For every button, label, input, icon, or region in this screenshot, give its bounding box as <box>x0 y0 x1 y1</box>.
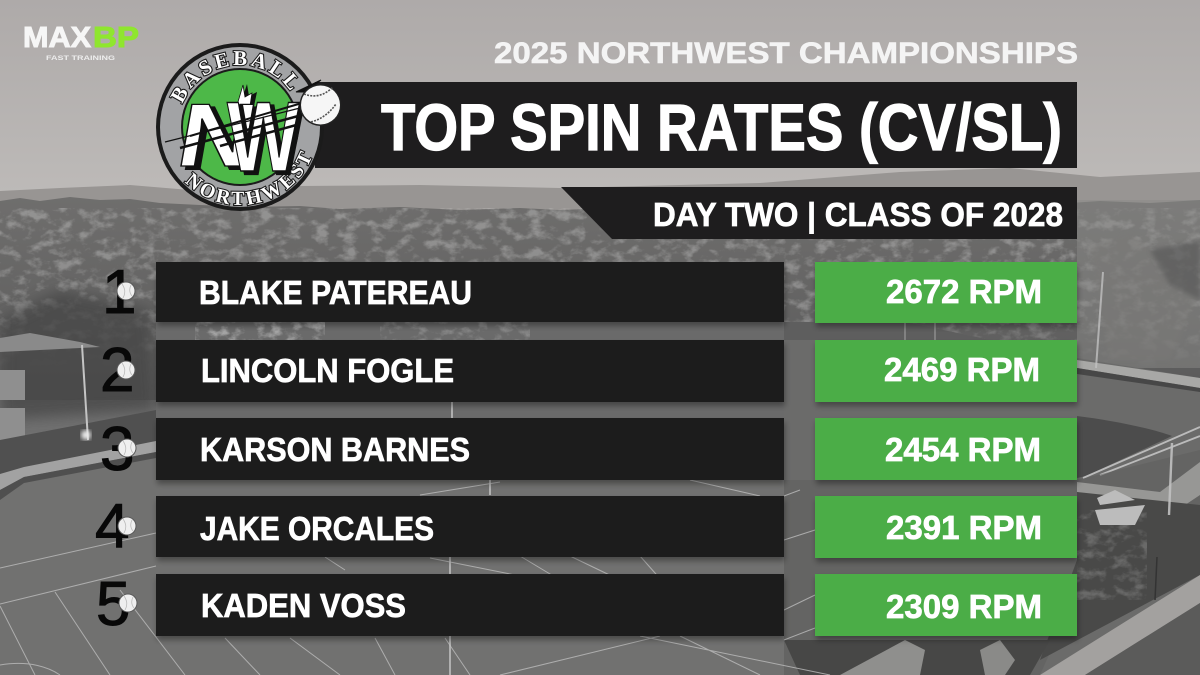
badge monogram NW: W <box>227 82 300 192</box>
value bar: 2391 RPM: 2391 RPM <box>886 509 1042 546</box>
badge monogram NW <box>165 82 304 195</box>
logo: MAXBP Fast Training: MAX <box>23 22 92 54</box>
value bar: 2672 RPM: 2672 RPM <box>886 273 1042 310</box>
value bar: 2454 RPM <box>815 418 1077 480</box>
field lines <box>0 480 830 675</box>
badge monogram NW: N <box>176 88 269 188</box>
right outfield <box>784 322 1200 675</box>
player bar: Karson Barnes <box>156 418 784 480</box>
baseball icon <box>118 516 136 536</box>
badge text: Baseball: BASEBALL <box>168 50 298 106</box>
baseball icon <box>116 282 136 300</box>
player bar: Blake Patereau <box>156 262 784 322</box>
player bar: Kaden Voss <box>156 574 784 636</box>
subtitle banner: DAY TWO | CLASS OF 2028 <box>653 196 1063 233</box>
logo: MAXBP Fast Training: FAST TRAINING <box>46 55 115 62</box>
player bar: Blake Patereau: BLAKE PATEREAU <box>199 274 472 311</box>
rank 5: 5 <box>96 570 130 639</box>
baseball icon <box>116 360 136 380</box>
logo: MAXBP Fast Training: BP <box>93 22 139 54</box>
field <box>0 400 1077 675</box>
baseball icon <box>118 438 136 458</box>
player bar: Lincoln Fogle: LINCOLN FOGLE <box>201 352 454 389</box>
player bar: Jake Orcales: JAKE ORCALES <box>200 510 434 547</box>
logo: MAXBP Fast Training <box>23 22 139 62</box>
rank 1: 1 <box>102 258 136 327</box>
subtitle banner <box>561 187 1077 239</box>
logo: Baseball Northwest badge <box>156 43 340 211</box>
title banner: TOP SPIN RATES (CV/SL) <box>381 90 1062 164</box>
player bar: Lincoln Fogle <box>156 340 784 402</box>
value bar: 2454 RPM: 2454 RPM <box>885 431 1041 468</box>
badge text: Northwest: NORTHWEST <box>183 149 313 206</box>
row 1 <box>102 258 1077 327</box>
value bar: 2469 RPM <box>815 340 1077 402</box>
badge monogram NW: W <box>231 85 304 195</box>
rank 3: 3 <box>100 415 134 484</box>
row 3 <box>100 415 1077 484</box>
fence left <box>0 441 156 490</box>
value bar: 2309 RPM: 2309 RPM <box>886 588 1042 625</box>
value bar: 2469 RPM: 2469 RPM <box>884 351 1040 388</box>
player bar: Kaden Voss: KADEN VOSS <box>201 587 406 624</box>
row 2 <box>100 336 1077 405</box>
row 4 <box>95 492 1077 561</box>
rank 4: 4 <box>95 492 129 561</box>
row 5 <box>96 570 1077 639</box>
value bar: 2672 RPM <box>815 262 1077 323</box>
darker hillside left <box>0 290 156 420</box>
value bar: 2391 RPM <box>815 496 1077 558</box>
baseball icon <box>118 594 138 612</box>
player bar: Jake Orcales <box>156 496 784 557</box>
event title: 2025 NORTHWEST CHAMPIONSHIPS <box>494 37 1078 70</box>
badge monogram NW: N <box>171 85 264 185</box>
player bar: Karson Barnes: KARSON BARNES <box>200 431 470 468</box>
value bar: 2309 RPM <box>815 574 1077 636</box>
rank 2: 2 <box>100 336 134 405</box>
badge baseball <box>296 80 342 126</box>
